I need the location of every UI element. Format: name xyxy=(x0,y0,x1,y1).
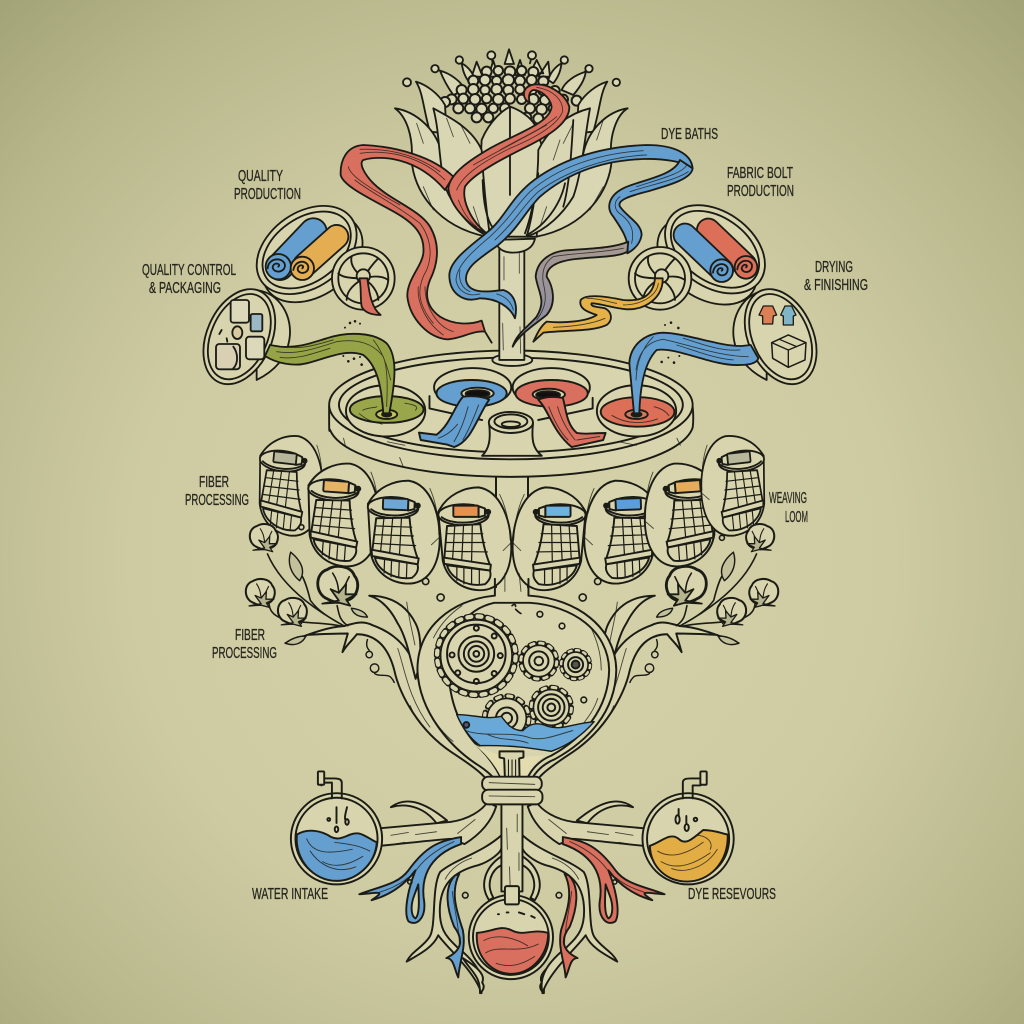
ribbon: red falling from bath xyxy=(538,397,606,447)
chamber window xyxy=(430,574,609,795)
water in chamber xyxy=(457,715,594,751)
pod: fabric bolts left xyxy=(240,188,379,320)
loom 4 left xyxy=(438,487,511,590)
loom 4 right xyxy=(513,487,586,590)
roots left xyxy=(373,801,561,993)
label: water intake: WATER INTAKE xyxy=(252,886,328,903)
stem from flower xyxy=(492,239,535,366)
pod: drying and finishing xyxy=(731,278,831,395)
bolt blue xyxy=(685,235,733,282)
label: drying and finishing: DRYING xyxy=(815,259,853,276)
pod: fabric bolts right xyxy=(641,187,782,323)
loom 1 left xyxy=(253,432,328,539)
loom 2 right xyxy=(641,461,721,569)
label: fiber processing upper: FIBER xyxy=(199,474,229,491)
loom 3 right xyxy=(582,479,659,585)
lower stem xyxy=(501,802,522,905)
ribbon: red central curl xyxy=(448,84,569,233)
label: quality control and packaging xyxy=(142,262,236,297)
left upper pods xyxy=(189,188,395,413)
chamber shell xyxy=(417,596,616,797)
label: fiber processing upper: PROCESSING xyxy=(185,492,249,509)
seed head xyxy=(403,49,620,124)
vine and cotton left xyxy=(246,524,507,797)
flask: water intake xyxy=(291,771,382,884)
stem joint xyxy=(495,588,528,606)
label: fabric bolt production: PRODUCTION xyxy=(727,183,794,200)
label: fiber processing lower xyxy=(212,627,277,662)
flask: bottom red xyxy=(469,886,553,979)
label: quality production: QUALITY xyxy=(238,168,283,185)
well: green xyxy=(346,385,425,436)
loom 1 right xyxy=(696,432,771,539)
wheel left xyxy=(332,247,395,315)
bolt orange xyxy=(291,237,337,280)
label: quality production: PRODUCTION xyxy=(234,186,301,203)
ribbon: yellow xyxy=(533,278,663,342)
ribbon: red left xyxy=(341,145,492,343)
label: quality production xyxy=(234,168,301,203)
chamber floating dots xyxy=(299,525,724,703)
label: weaving loom: WEAVING xyxy=(769,490,807,507)
label: fabric bolt production xyxy=(727,165,794,200)
red streams xyxy=(560,837,665,977)
ribbon: blue right xyxy=(629,333,758,413)
ribbon: blue falling from bath xyxy=(419,396,489,447)
droplets xyxy=(660,321,680,364)
blue streams xyxy=(359,837,464,977)
label: fabric bolt production: FABRIC BOLT xyxy=(727,165,793,182)
tray rim xyxy=(329,407,693,477)
well: blue xyxy=(434,368,511,407)
right upper pods xyxy=(533,187,831,413)
lotus petals xyxy=(395,82,628,237)
label: quality control and packaging: QUALITY CONTROL xyxy=(142,262,236,279)
loom 2 left xyxy=(303,461,383,569)
loom 3 left xyxy=(365,479,442,585)
central stem below tray xyxy=(496,462,528,607)
label: drying and finishing xyxy=(804,259,868,294)
ribbon: grey purple xyxy=(513,242,628,347)
label: fiber processing upper xyxy=(185,474,249,509)
text: LOOM xyxy=(785,509,808,526)
label: fiber processing lower: PROCESSING xyxy=(212,645,277,662)
roots right xyxy=(463,801,651,993)
weaving looms row xyxy=(253,432,771,590)
lotus flower and top ribbons xyxy=(341,49,693,366)
central drain xyxy=(482,412,542,456)
knot bands xyxy=(482,777,542,804)
machinery chamber with cotton vines xyxy=(246,524,778,797)
looms right side xyxy=(513,432,771,590)
wheel right xyxy=(629,247,691,310)
root dots xyxy=(408,880,617,898)
label: dye reservoirs: DYE RESEVOURS xyxy=(688,886,776,903)
bolt red xyxy=(708,230,757,279)
label: drying and finishing: & FINISHING xyxy=(804,277,868,294)
small gears xyxy=(485,643,590,740)
pod: quality control xyxy=(189,278,290,395)
big gear xyxy=(437,616,516,695)
droplets xyxy=(342,320,363,366)
ribbon: blue main xyxy=(449,145,693,318)
label: weaving loom xyxy=(769,490,808,526)
flask: dye reservoir xyxy=(642,771,734,884)
ribbon: green xyxy=(265,334,394,413)
bolt blue xyxy=(266,232,313,279)
well: red xyxy=(513,368,590,407)
label: fiber processing lower: FIBER xyxy=(235,627,265,644)
roots, pipes and reservoirs xyxy=(291,771,734,993)
label: dye baths: DYE BATHS xyxy=(661,126,718,143)
vine and cotton right xyxy=(517,524,778,797)
label: quality control and packaging: & PACKAGING xyxy=(149,280,221,297)
well: orange red xyxy=(597,385,676,436)
dye bath tray xyxy=(329,351,693,477)
inner column xyxy=(500,751,523,797)
